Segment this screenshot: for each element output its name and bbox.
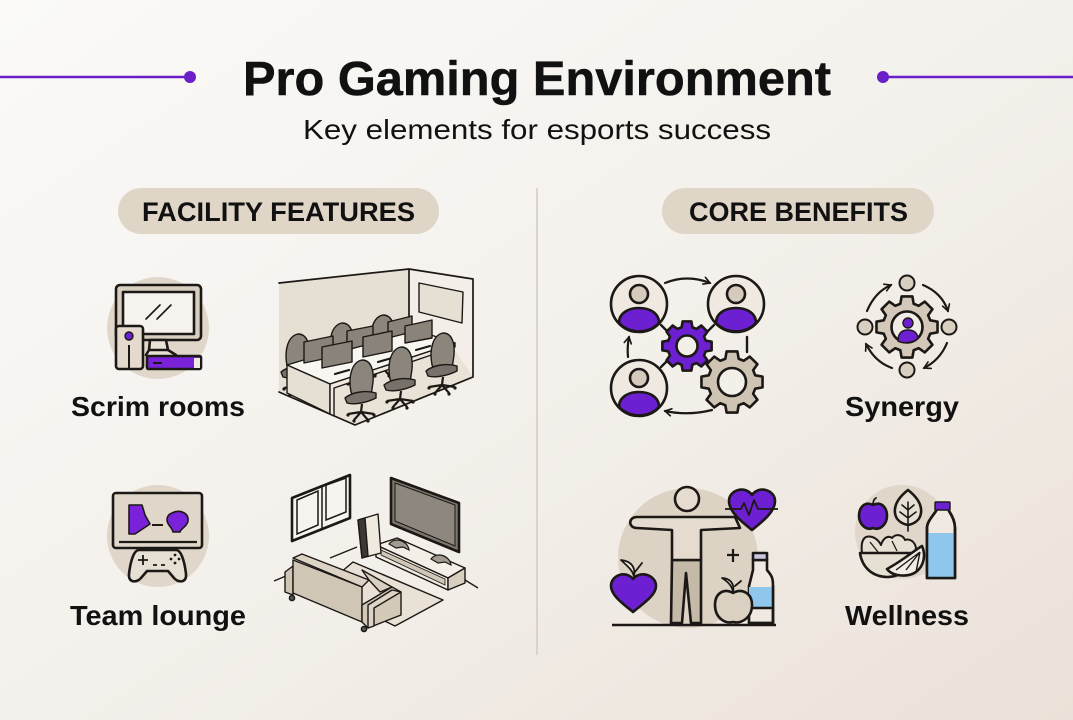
panel: team lounge: [70, 475, 478, 632]
icon: food and water: [855, 485, 955, 579]
icon: monitor and controller: [107, 485, 209, 587]
icon: synergy gear: [858, 276, 956, 378]
heading pill: core benefits: [662, 188, 934, 234]
heading pill: facility features: FACILITY FEATURES: [142, 197, 415, 227]
illustration: body and health: [611, 487, 778, 628]
right header accent line: [877, 71, 1073, 83]
icon: computer: [107, 277, 209, 379]
label: synergy: Synergy: [845, 391, 959, 422]
illustration: scrim room: [279, 269, 473, 425]
heading pill: facility features: [118, 188, 439, 234]
heading pill: core benefits: CORE BENEFITS: [689, 197, 908, 227]
panel: synergy: [611, 276, 959, 422]
title: Pro Gaming Environment: [243, 53, 831, 106]
illustration: team network: [611, 276, 764, 416]
label: team lounge: Team lounge: [70, 600, 246, 631]
illustration: lounge: [274, 475, 478, 632]
panel: wellness: [611, 485, 969, 631]
panel: scrim rooms: [71, 269, 473, 425]
label: scrim rooms: Scrim rooms: [71, 391, 245, 422]
left header accent line: [0, 71, 196, 83]
subtitle: Key elements for esports success: [303, 114, 771, 145]
label: wellness: Wellness: [845, 600, 969, 631]
